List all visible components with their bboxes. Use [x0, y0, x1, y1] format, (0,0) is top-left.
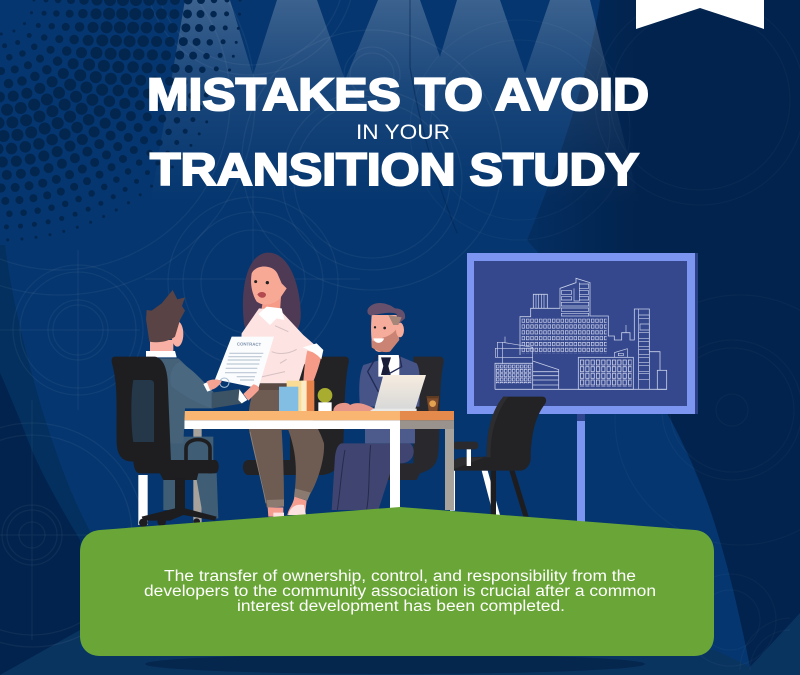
green text card [80, 507, 714, 656]
desk items [279, 381, 439, 411]
her feet [268, 497, 307, 517]
visitor chair at right [450, 397, 546, 517]
blue folder [279, 387, 298, 411]
hands on contract [207, 380, 259, 401]
card text: interest development has been completed. [237, 598, 565, 615]
table [138, 411, 454, 525]
back table legs [193, 429, 454, 523]
his head and neck [150, 340, 173, 352]
her belt [258, 383, 287, 390]
title [147, 69, 649, 195]
his torso [158, 358, 213, 443]
ribbon tab [636, 0, 764, 29]
his jacket [359, 355, 420, 407]
heading line 2: IN YOUR [356, 121, 450, 144]
card shape [80, 507, 714, 656]
book stack [287, 381, 307, 411]
heading line 3: TRANSITION STUDY [150, 144, 639, 195]
her hair [243, 253, 301, 333]
woman's chair [243, 357, 349, 475]
his head [371, 315, 399, 352]
card text [144, 568, 656, 615]
his arm [170, 362, 212, 408]
his legs [332, 443, 414, 510]
contract document [215, 337, 274, 388]
presentation board [467, 253, 698, 522]
contract document: CONTRACT [237, 341, 262, 347]
hands [333, 403, 374, 411]
concentric line decoration right [410, 0, 800, 670]
potted plant [318, 388, 332, 403]
her neck and face [262, 287, 282, 315]
heading line 1: MISTAKES TO AVOID [147, 69, 649, 120]
shadow under card [145, 654, 645, 674]
card text: The transfer of ownership, control, and responsibility from the [164, 568, 636, 585]
meeting scene [112, 253, 454, 527]
board pole [577, 414, 585, 522]
her arm [303, 351, 321, 388]
concentric line decoration left [0, 0, 502, 647]
laptop [374, 375, 426, 410]
man on left [112, 290, 247, 527]
woman [241, 253, 324, 518]
office chair [112, 357, 219, 488]
chair base [142, 487, 217, 521]
halftone dots [0, 0, 240, 240]
city blueprint drawing [495, 278, 667, 389]
her trousers [249, 383, 324, 507]
man on right [332, 303, 444, 510]
coffee cup [427, 396, 439, 411]
his chair [353, 357, 444, 480]
card text: developers to the community association is crucial after a common [144, 583, 656, 600]
her blouse [241, 308, 317, 383]
board frame [467, 253, 698, 414]
his legs [163, 457, 218, 518]
